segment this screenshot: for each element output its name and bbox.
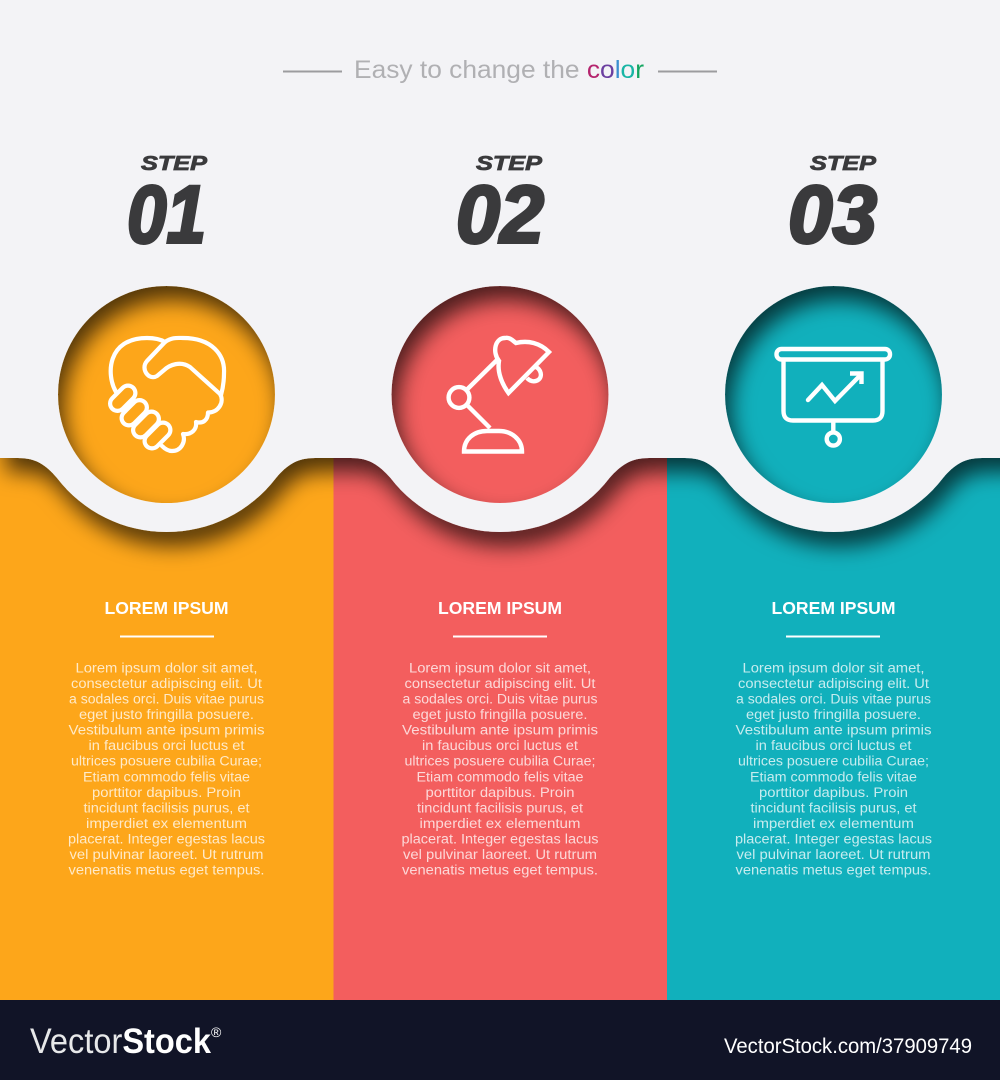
body copy: ultrices posuere cubilia Curae; [71, 754, 262, 769]
body copy: placerat. Integer egestas lacus [68, 831, 265, 846]
registered mark: ® [211, 1024, 222, 1040]
heading: LOREM IPSUM [104, 598, 228, 618]
body copy: Lorem ipsum dolor sit amet, [76, 660, 258, 676]
body copy: porttitor dapibus. Proin [759, 785, 908, 800]
body copy: imperdiet ex elementum [753, 816, 914, 831]
body copy: eget justo fringilla posuere. [79, 707, 254, 722]
text block: step 3 [735, 598, 932, 878]
body copy: consectetur adipiscing elit. Ut [738, 676, 929, 691]
disc: step 1 orange circle [54, 282, 278, 506]
body copy: porttitor dapibus. Proin [426, 785, 574, 800]
body copy: Vestibulum ante ipsum primis [736, 723, 932, 738]
body copy: venenatis metus eget tempus. [402, 862, 598, 878]
body copy: Lorem ipsum dolor sit amet, [742, 660, 924, 676]
body copy: Etiam commodo felis vitae [416, 769, 584, 784]
body copy: porttitor dapibus. Proin [92, 785, 241, 800]
body copy: Vestibulum ante ipsum primis [402, 723, 598, 738]
body copy: eget justo fringilla posuere. [412, 707, 588, 722]
body copy: a sodales orci. Duis vitae purus [402, 692, 598, 707]
disc: step 3 teal circle [722, 282, 946, 506]
body copy [402, 660, 599, 878]
body copy [68, 660, 265, 878]
paper plate with wave edge and circular cut-outs [0, 0, 1000, 532]
panel: step 3 teal [667, 458, 1000, 1000]
panel: step 1 orange [0, 458, 334, 1000]
body copy: Lorem ipsum dolor sit amet, [409, 660, 591, 676]
step 1 label: STEP [141, 152, 207, 175]
body copy: vel pulvinar laoreet. Ut rutrum [70, 847, 264, 862]
underline [786, 636, 880, 638]
footer logo: VectorStock [30, 1022, 211, 1061]
heading: LOREM IPSUM [438, 598, 562, 618]
body copy: venenatis metus eget tempus. [68, 862, 264, 878]
body copy: consectetur adipiscing elit. Ut [71, 676, 262, 691]
body copy: Etiam commodo felis vitae [83, 769, 250, 784]
body copy: vel pulvinar laoreet. Ut rutrum [736, 847, 930, 862]
body copy: eget justo fringilla posuere. [746, 707, 921, 722]
body copy: Etiam commodo felis vitae [750, 769, 917, 784]
body copy: in faucibus orci luctus et [422, 738, 578, 753]
icon: handshake heart [111, 338, 224, 451]
step 3 label: STEP [810, 152, 876, 175]
step 2 label: STEP [476, 152, 542, 175]
body copy: imperdiet ex elementum [86, 816, 247, 831]
body copy [735, 660, 932, 878]
body copy: in faucibus orci luctus et [756, 738, 912, 753]
step 3 label: 03 [788, 170, 877, 260]
step 2 label: 02 [456, 169, 544, 261]
icon: desk lamp [449, 338, 549, 452]
icon: presentation board with rising chart [776, 349, 890, 446]
panel: step 2 red [334, 458, 667, 1000]
title: Easy to change the color [354, 56, 644, 84]
footer url: VectorStock.com/37909749 [724, 1035, 972, 1058]
underline [453, 636, 547, 638]
text block: step 1 [68, 598, 265, 878]
step 1 label: 01 [127, 170, 206, 260]
body copy: consectetur adipiscing elit. Ut [404, 676, 596, 691]
body copy: a sodales orci. Duis vitae purus [736, 692, 931, 707]
body copy: tincidunt facilisis purus, et [750, 800, 917, 815]
body copy: imperdiet ex elementum [420, 816, 580, 831]
heading: LOREM IPSUM [772, 598, 896, 618]
disc: step 2 red circle [388, 282, 612, 506]
body copy: ultrices posuere cubilia Curae; [738, 754, 929, 769]
footer bar [0, 1000, 1000, 1080]
body copy: placerat. Integer egestas lacus [402, 831, 599, 846]
body copy: tincidunt facilisis purus, et [84, 800, 250, 815]
body copy: Vestibulum ante ipsum primis [68, 723, 265, 738]
body copy: in faucibus orci luctus et [88, 738, 245, 753]
body copy: a sodales orci. Duis vitae purus [69, 692, 264, 707]
body copy: tincidunt facilisis purus, et [417, 800, 583, 815]
body copy: venenatis metus eget tempus. [736, 862, 932, 878]
body copy: ultrices posuere cubilia Curae; [404, 754, 596, 769]
text block: step 2 [402, 598, 599, 878]
underline [120, 636, 214, 638]
body copy: vel pulvinar laoreet. Ut rutrum [403, 847, 597, 862]
body copy: placerat. Integer egestas lacus [735, 831, 932, 846]
